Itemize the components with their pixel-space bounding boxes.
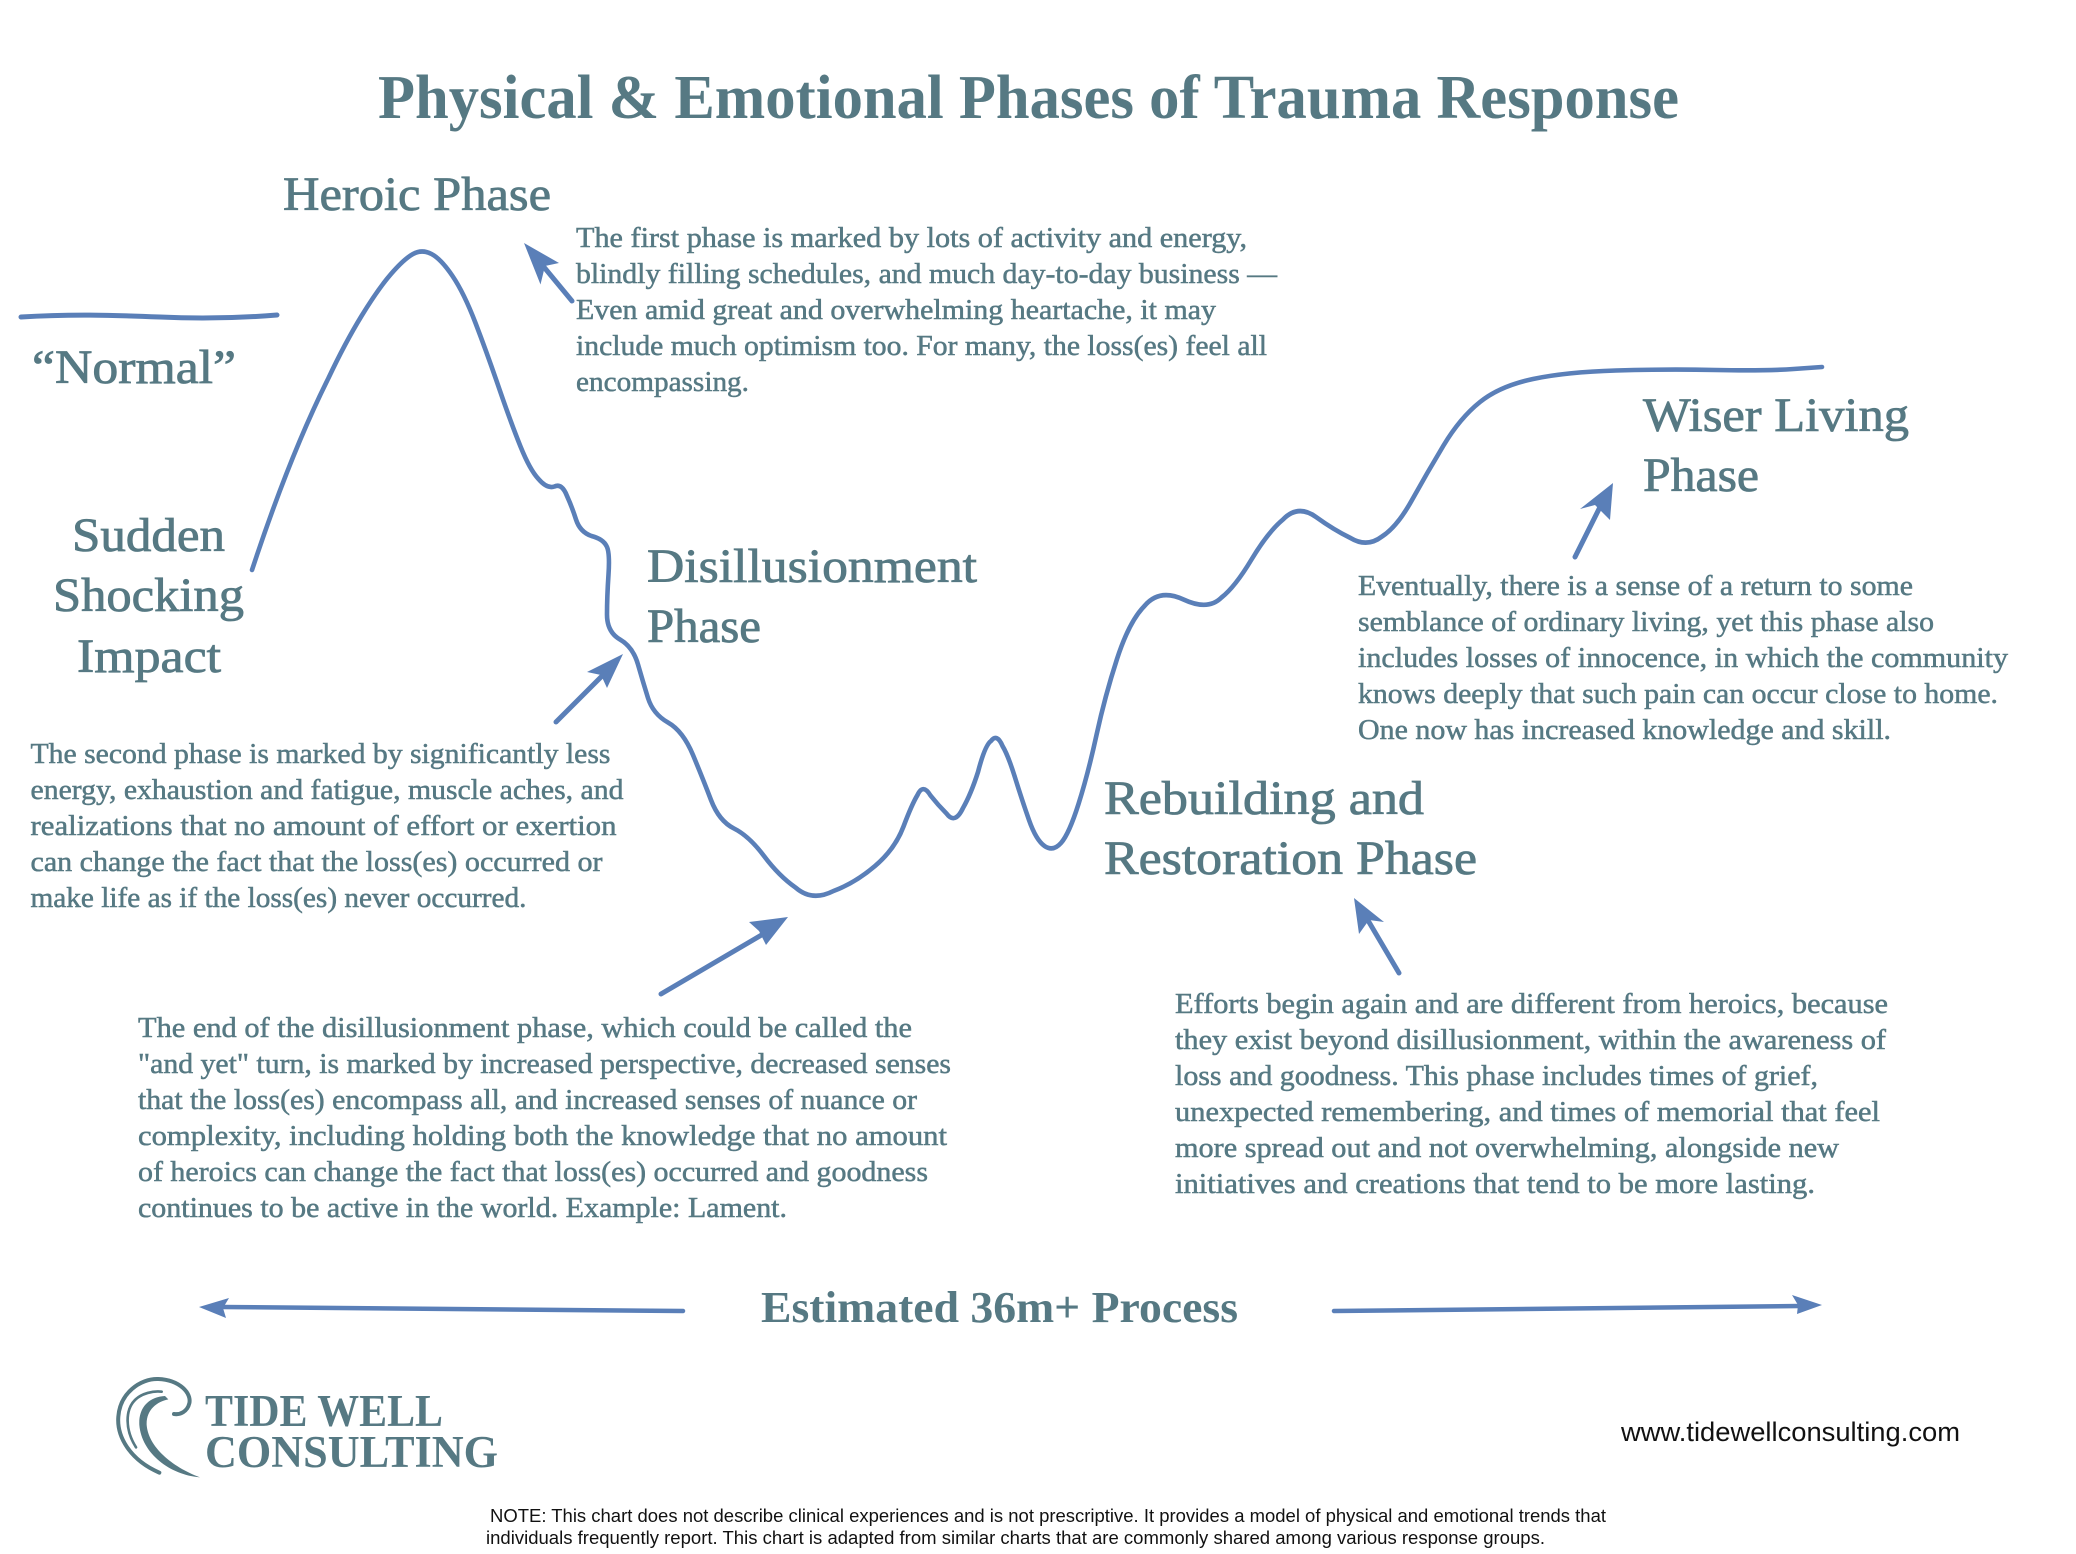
timeline arrow: right bbox=[1334, 1295, 1822, 1314]
arrow: to rebuilding bbox=[1354, 898, 1399, 973]
timeline arrow: left bbox=[199, 1298, 683, 1318]
label: Sudden Shocking Impact: Impact bbox=[77, 630, 222, 683]
logo: Tide Well Consulting bbox=[118, 1379, 498, 1477]
text: wiser living description: semblance of ordinary living, yet this phase also bbox=[1358, 607, 1934, 638]
text: wiser living description: includes losses of innocence, in which the community bbox=[1358, 643, 2008, 674]
website: www.tidewellconsulting.com bbox=[1620, 1417, 1960, 1447]
label: Normal: “Normal” bbox=[32, 341, 236, 394]
label: Rebuilding and Restoration Phase: Restoration Phase bbox=[1104, 832, 1477, 885]
arrow: to and-yet turn bbox=[661, 917, 788, 994]
label: Disillusionment Phase: Disillusionment bbox=[647, 540, 978, 593]
text: end of disillusionment description: The end of the disillusionment phase, which could be called the bbox=[138, 1013, 912, 1044]
label: Wiser Living Phase: Phase bbox=[1643, 449, 1759, 502]
disclaimer note bbox=[486, 1505, 1606, 1548]
text: second phase description: realizations that no amount of effort or exertion bbox=[30, 811, 616, 842]
text: end of disillusionment description: of heroics can change the fact that loss(es) occurred and goodness bbox=[138, 1157, 928, 1188]
text: end of disillusionment description: "and yet" turn, is marked by increased perspective, decreased senses bbox=[138, 1049, 951, 1080]
text: wiser living description: Eventually, there is a sense of a return to some bbox=[1358, 571, 1913, 602]
text: second phase description: energy, exhaustion and fatigue, muscle aches, and bbox=[30, 775, 624, 806]
text: wiser living description bbox=[1358, 571, 2008, 746]
text: first phase description: Even amid great and overwhelming heartache, it may bbox=[576, 295, 1216, 326]
logo wordmark: TIDE WELL bbox=[205, 1386, 443, 1436]
disclaimer note: individuals frequently report. This chart is adapted from similar charts that are commonly shared among various response groups. bbox=[486, 1527, 1545, 1548]
text: rebuilding description: Efforts begin again and are different from heroics, because bbox=[1175, 989, 1888, 1020]
text: second phase description: make life as if the loss(es) never occurred. bbox=[30, 883, 526, 914]
text: end of disillusionment description bbox=[138, 1013, 951, 1224]
baseline stroke: normal bbox=[21, 315, 277, 318]
timeline label: Estimated 36m+ Process bbox=[761, 1283, 1238, 1332]
text: first phase description: The first phase is marked by lots of activity and energy, bbox=[576, 223, 1247, 254]
text: rebuilding description: they exist beyond disillusionment, within the awareness of bbox=[1175, 1025, 1887, 1056]
text: first phase description: blindly filling schedules, and much day-to-day business — bbox=[576, 259, 1278, 290]
text: wiser living description: knows deeply that such pain can occur close to home. bbox=[1358, 679, 1998, 710]
text: second phase description: can change the fact that the loss(es) occurred or bbox=[30, 847, 603, 878]
text: rebuilding description: more spread out and not overwhelming, alongside new bbox=[1175, 1133, 1840, 1164]
label: Rebuilding and Restoration Phase bbox=[1104, 772, 1477, 885]
text: second phase description: The second phase is marked by significantly less bbox=[30, 739, 610, 770]
text: wiser living description: One now has increased knowledge and skill. bbox=[1358, 715, 1891, 746]
arrow: to wiser living bbox=[1575, 483, 1613, 557]
text: rebuilding description: unexpected remembering, and times of memorial that feel bbox=[1175, 1097, 1880, 1128]
text: end of disillusionment description: continues to be active in the world. Example: Lament. bbox=[138, 1193, 787, 1224]
text: rebuilding description: initiatives and creations that tend to be more lasting. bbox=[1175, 1169, 1815, 1200]
label: Wiser Living Phase: Wiser Living bbox=[1643, 389, 1909, 442]
text: first phase description bbox=[576, 223, 1278, 398]
icon: wave bbox=[118, 1379, 200, 1477]
label: Disillusionment Phase bbox=[647, 540, 978, 653]
text: rebuilding description bbox=[1175, 989, 1888, 1200]
trauma response curve bbox=[252, 252, 1822, 896]
label: Disillusionment Phase: Phase bbox=[647, 600, 761, 653]
label: Rebuilding and Restoration Phase: Rebuilding and bbox=[1104, 772, 1424, 825]
logo wordmark: CONSULTING bbox=[205, 1427, 498, 1477]
label: Heroic Phase: Heroic Phase bbox=[283, 168, 551, 221]
logo wordmark bbox=[205, 1386, 498, 1477]
title: Physical & Emotional Phases of Trauma Response bbox=[378, 64, 1679, 132]
text: second phase description bbox=[30, 739, 624, 914]
label: Wiser Living Phase bbox=[1643, 389, 1909, 502]
text: end of disillusionment description: complexity, including holding both the knowledge that no amount bbox=[138, 1121, 947, 1152]
arrow: to disillusionment bbox=[556, 654, 623, 722]
text: first phase description: encompassing. bbox=[576, 367, 749, 398]
label: Sudden Shocking Impact: Shocking bbox=[53, 569, 244, 622]
text: end of disillusionment description: that the loss(es) encompass all, and increased senses of nuance or bbox=[138, 1085, 918, 1116]
disclaimer note: NOTE: This chart does not describe clinical experiences and is not prescriptive. It provides a model of physical and emotional trends that bbox=[490, 1505, 1606, 1526]
label: Sudden Shocking Impact bbox=[53, 509, 244, 683]
text: first phase description: include much optimism too. For many, the loss(es) feel all bbox=[576, 331, 1267, 362]
label: Sudden Shocking Impact: Sudden bbox=[72, 509, 225, 562]
arrow: to heroic peak bbox=[524, 243, 572, 301]
text: rebuilding description: loss and goodness. This phase includes times of grief, bbox=[1175, 1061, 1818, 1092]
